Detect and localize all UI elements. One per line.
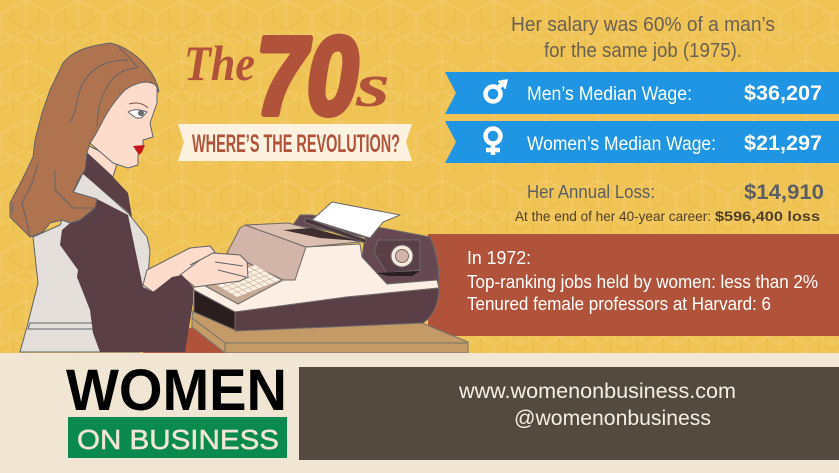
hair [10, 43, 159, 237]
title: The 70s [184, 15, 390, 138]
1972 text: Tenured female professors at Harvard: 6 [467, 294, 771, 314]
belt [28, 323, 93, 329]
1972 text: Top-ranking jobs held by women: less than 2% [467, 272, 818, 292]
women's wage ribbon: Women’s Median Wage: [527, 134, 716, 155]
salary heading: Her salary was 60% of a man’s [511, 14, 775, 36]
illustration: table [192, 310, 468, 353]
lower body [235, 288, 439, 331]
annual loss: At the end of her 40-year career: [515, 208, 711, 224]
eye [128, 103, 148, 118]
men's wage ribbon: Men’s Median Wage: [527, 84, 692, 105]
annual loss: Her Annual Loss: [527, 182, 655, 202]
paper sheet [312, 202, 400, 238]
collar [83, 153, 132, 217]
women's wage ribbon [445, 121, 839, 163]
illustration: woman [10, 43, 248, 352]
1972 text [467, 248, 818, 314]
subtitle ribbon [178, 124, 412, 161]
annual loss [515, 181, 824, 224]
annual loss: $14,910 [744, 181, 824, 204]
contact panel: @womenonbusiness [514, 407, 711, 430]
panel: 1972 statistics band [428, 234, 839, 336]
contact panel: www.womenonbusiness.com [458, 380, 736, 403]
men's wage ribbon: $36,207 [744, 82, 822, 105]
s: s [355, 52, 390, 120]
knob shadow [376, 271, 420, 276]
black front [194, 290, 235, 330]
neck [87, 145, 118, 177]
subtitle ribbon: WHERE’S THE REVOLUTION? [192, 130, 400, 158]
keyboard base [200, 263, 283, 304]
cream body [193, 244, 439, 312]
knob panel [374, 240, 420, 273]
footer band [0, 353, 839, 473]
icon: male symbol [486, 80, 507, 102]
70: 70 [256, 15, 358, 138]
face [90, 82, 157, 168]
typewriter slanted panel [227, 225, 306, 280]
contact panel [299, 367, 839, 460]
carriage slot [283, 228, 360, 241]
men's wage ribbon [445, 72, 839, 114]
finger lines [190, 260, 246, 277]
illustration: typewriter [193, 202, 439, 331]
keys [212, 265, 280, 297]
annual loss: $596,400 loss [715, 208, 820, 224]
logo: WOMEN [66, 358, 287, 423]
salary heading [511, 14, 775, 62]
women's wage ribbon: $21,297 [744, 132, 822, 155]
sleeve [60, 198, 193, 352]
roller [304, 218, 367, 243]
front hand [180, 253, 248, 287]
lips [133, 145, 145, 155]
icon: female symbol [486, 128, 500, 155]
1972 text: In 1972: [467, 248, 531, 268]
salary heading: for the same job (1975). [544, 40, 742, 62]
dress [20, 173, 150, 352]
logo: ON BUSINESS [77, 424, 279, 455]
background [0, 0, 839, 353]
knob [391, 245, 413, 267]
hair lines [12, 47, 138, 236]
back arm [143, 246, 215, 292]
typewriter top [245, 223, 360, 247]
The: The [184, 35, 255, 91]
rust floor wedge [142, 327, 225, 353]
logo [66, 358, 287, 458]
typewriter rear body [293, 215, 439, 284]
